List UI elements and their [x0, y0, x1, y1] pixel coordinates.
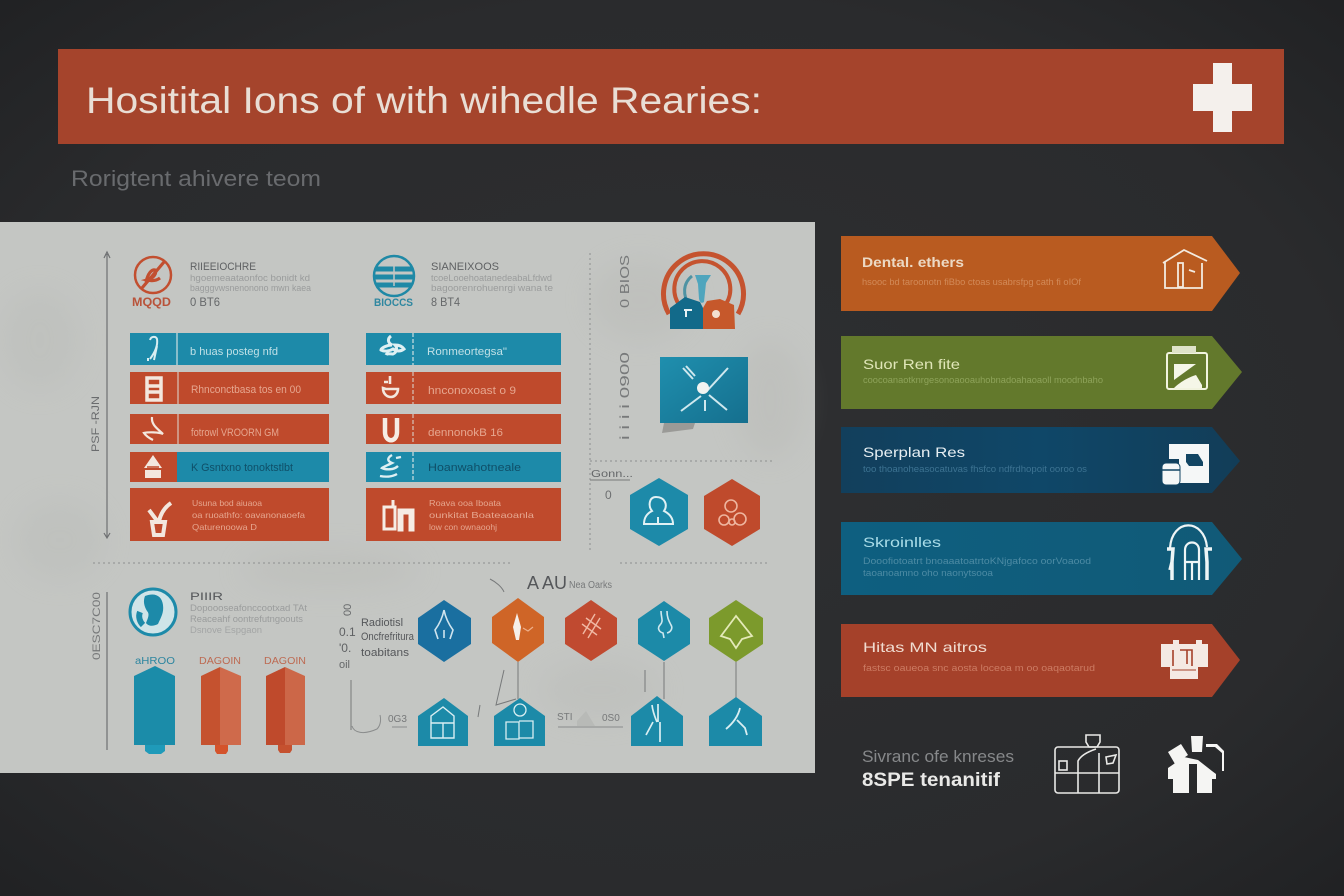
hexagon: blue: [418, 600, 471, 662]
house 3: [631, 696, 683, 746]
row 1: b huas posteg nfd: [190, 346, 278, 358]
row 2: Rhnconctbasa tos en 00: [191, 384, 301, 396]
panel: arrow banner 2: [841, 336, 1242, 409]
left axis arrow with label: PSF -RJN: [90, 396, 102, 452]
block: right column header: 8 BT4: [431, 295, 460, 309]
panel: arrow banner 2: coocoanaotknrgesonoaooauhobnadoahaoaoll moodnbaho: [863, 375, 1103, 385]
footer note: 8SPE tenanitif: [862, 770, 1001, 791]
bar 3: [264, 656, 306, 753]
list: left column rows: [130, 333, 329, 541]
row 5: low con ownaoohj: [429, 522, 497, 532]
text block: lower left note: Dsnove Espgaon: [190, 625, 262, 635]
annotation heading: A AU: [527, 573, 567, 593]
bottom-left axis: 0ESC7C00: [91, 592, 103, 660]
annotation heading: [527, 573, 612, 593]
small axis notes: STI: [557, 712, 573, 723]
text block: lower left note: Reaceahf oontrefutngoouts: [190, 614, 304, 624]
icon row: house badges: [418, 696, 762, 746]
panel: arrow banner 4: [841, 522, 1242, 595]
row 4: Hoanwahotneale: [428, 462, 521, 474]
row 1: [366, 333, 561, 365]
header banner: [58, 49, 1284, 144]
panel: main light sheet: [0, 222, 815, 773]
icon row: hexagons: [418, 598, 763, 662]
legend text: middle: 00: [342, 604, 354, 616]
icon: red group hexagon: [704, 479, 760, 546]
row 2: [130, 372, 329, 404]
hexagon: orange: [492, 598, 544, 662]
legend text: middle: Radiotisl: [361, 617, 403, 629]
left axis arrow with label: [90, 252, 110, 538]
legend text: middle: Oncfrefritura: [361, 631, 415, 643]
block: right column header: [374, 256, 553, 309]
row 3: [366, 414, 561, 444]
panel: arrow banner 3: Sperplan Res: [863, 444, 965, 460]
icon: solid home group: [1168, 736, 1224, 793]
block: right column header: SIANEIXOOS: [431, 261, 499, 273]
icon: people under arc: [1167, 525, 1212, 580]
rotated labels upper right: 0 BIOS: [617, 255, 632, 308]
bar 1: aHROO: [135, 656, 175, 667]
text block: lower left note: [190, 591, 308, 635]
bar 2: [199, 656, 241, 754]
rotated labels upper right: [617, 255, 632, 440]
footer note: [862, 747, 1014, 791]
icon: box and jar: [1162, 444, 1209, 485]
icon: medical cross: [1193, 63, 1252, 132]
hexagon: green: [709, 600, 763, 662]
text block: lower left note: PIIIR: [190, 591, 223, 603]
dotted section dividers: [93, 253, 772, 563]
panel: arrow banner 3: too thoanoheasocatuvas fhsfco ndfrdhopoit ooroo os: [863, 464, 1088, 474]
legend text: middle: 0.1: [339, 625, 356, 639]
icon: house outline: [1163, 250, 1207, 288]
bar chart: three 3D bars: [134, 656, 306, 754]
icon: red prohibition circle: [135, 257, 171, 293]
block: right column header: tcoeLooehoatanedeabaLfdwd: [431, 273, 552, 283]
text block: lower left note: Dopoooseafonccootxad TAt: [190, 603, 308, 613]
row 2: [366, 372, 561, 404]
panel: arrow banner 5: Hitas MN aitros: [863, 639, 987, 655]
panel: arrow banner 5: fastsc oaueoa snc aosta loceoa m oo oaqaotarud: [863, 663, 1095, 673]
icon: clipboard jar: [1167, 346, 1207, 389]
bar 1: [134, 656, 175, 754]
row 5: oa ruoathfo: oavanonaoefa: [192, 510, 305, 520]
small axis notes: [352, 711, 623, 733]
panel: arrow banner 3: [841, 427, 1240, 493]
panel: arrow banner 1: Dental. ethers: [862, 254, 964, 270]
house 1: [418, 698, 468, 746]
row 5: Roava ooa Iboata: [429, 498, 501, 508]
icon: equipment: [1161, 640, 1208, 679]
icon: outlined machine: [1055, 735, 1119, 793]
row 5: [366, 488, 561, 541]
legend text: middle: '0.: [339, 641, 351, 655]
panel: arrow banner 4: Skroinlles: [863, 534, 941, 550]
legend text: middle: toabitans: [361, 647, 410, 659]
row 3: dennonokB 16: [428, 427, 503, 439]
block: left column header: bagggvwsnenonono mwn kaea: [190, 283, 311, 293]
block: right column header: bagoorenrohuenrgi wana te: [431, 283, 553, 293]
hexagon: red: [565, 600, 617, 661]
row 4: [130, 452, 329, 482]
panel: arrow banner 4: Dooofiotoatrt bnoaaatoatrtoKNjgafoco oorVoaood: [863, 556, 1091, 566]
house 2: [494, 698, 545, 746]
block: left column header: 0 BT6: [190, 295, 220, 309]
block: left column header: MQQD: [132, 295, 171, 309]
row 1: Ronmeortegsa": [427, 346, 507, 358]
annotation heading: Nea Oarks: [569, 580, 612, 591]
legend text: middle: [339, 604, 415, 671]
row 5: Usuna bod aiuaoa: [192, 498, 262, 508]
block: left column header: [132, 257, 311, 309]
connector lines: [351, 579, 736, 730]
block: left column header: hgoemeaataonfoc bonidt kd: [190, 273, 310, 283]
block: right column header: BIOCCS: [374, 297, 413, 309]
icon: blue square with network: [660, 357, 748, 433]
row 3: [130, 414, 329, 444]
row 1: [130, 333, 329, 365]
panel: arrow banner 5: [841, 624, 1240, 697]
small label with underline: [590, 469, 633, 502]
list: right column rows: [366, 333, 561, 541]
legend text: middle: oil: [339, 659, 350, 671]
icon: teal person hexagon: [630, 478, 688, 546]
rotated labels upper right: i i i i 0900: [617, 352, 632, 440]
icon: blue head circle: [130, 589, 176, 635]
icon: blue striped circle: [374, 256, 414, 296]
bar 2: DAGOIN: [199, 656, 241, 667]
row 2: hnconoxoast o 9: [428, 385, 516, 397]
row 5: [130, 488, 329, 541]
small label with underline: 0: [605, 488, 612, 502]
footer note: Sivranc ofe knreses: [862, 747, 1014, 766]
panel: arrow banner 4: taoanoamno oho naonytsooa: [863, 568, 993, 578]
row 4: K Gsntxno tonoktstlbt: [191, 462, 293, 474]
title: Hositital Ions of with wihedle Rearies:: [86, 80, 762, 121]
small axis notes: 0S0: [602, 713, 620, 724]
block: left column header: RIIEEIOCHRE: [190, 261, 256, 273]
subtitle: Rorigtent ahivere teom: [71, 166, 321, 191]
panel: arrow banner 2: Suor Ren fite: [863, 356, 960, 372]
hexagon: teal: [638, 601, 690, 661]
small label with underline: Gonn...: [591, 469, 633, 480]
panel: arrow banner 1: [841, 236, 1240, 311]
row 3: fotrowl VROORN GM: [191, 427, 279, 439]
bar 3: DAGOIN: [264, 656, 306, 667]
house 4: [709, 697, 762, 746]
row 5: Qaturenoowa D: [192, 522, 257, 532]
row 5: ounkitat Boateaoanla: [429, 510, 534, 520]
small axis notes: 0G3: [388, 714, 407, 725]
panel: arrow banner 1: hsooc bd taroonotn fiBbo ctoas usabrsfpg cath fi oIOf: [862, 277, 1082, 287]
row 4: [366, 452, 561, 482]
icon: arc emblem with shields: [664, 254, 744, 329]
